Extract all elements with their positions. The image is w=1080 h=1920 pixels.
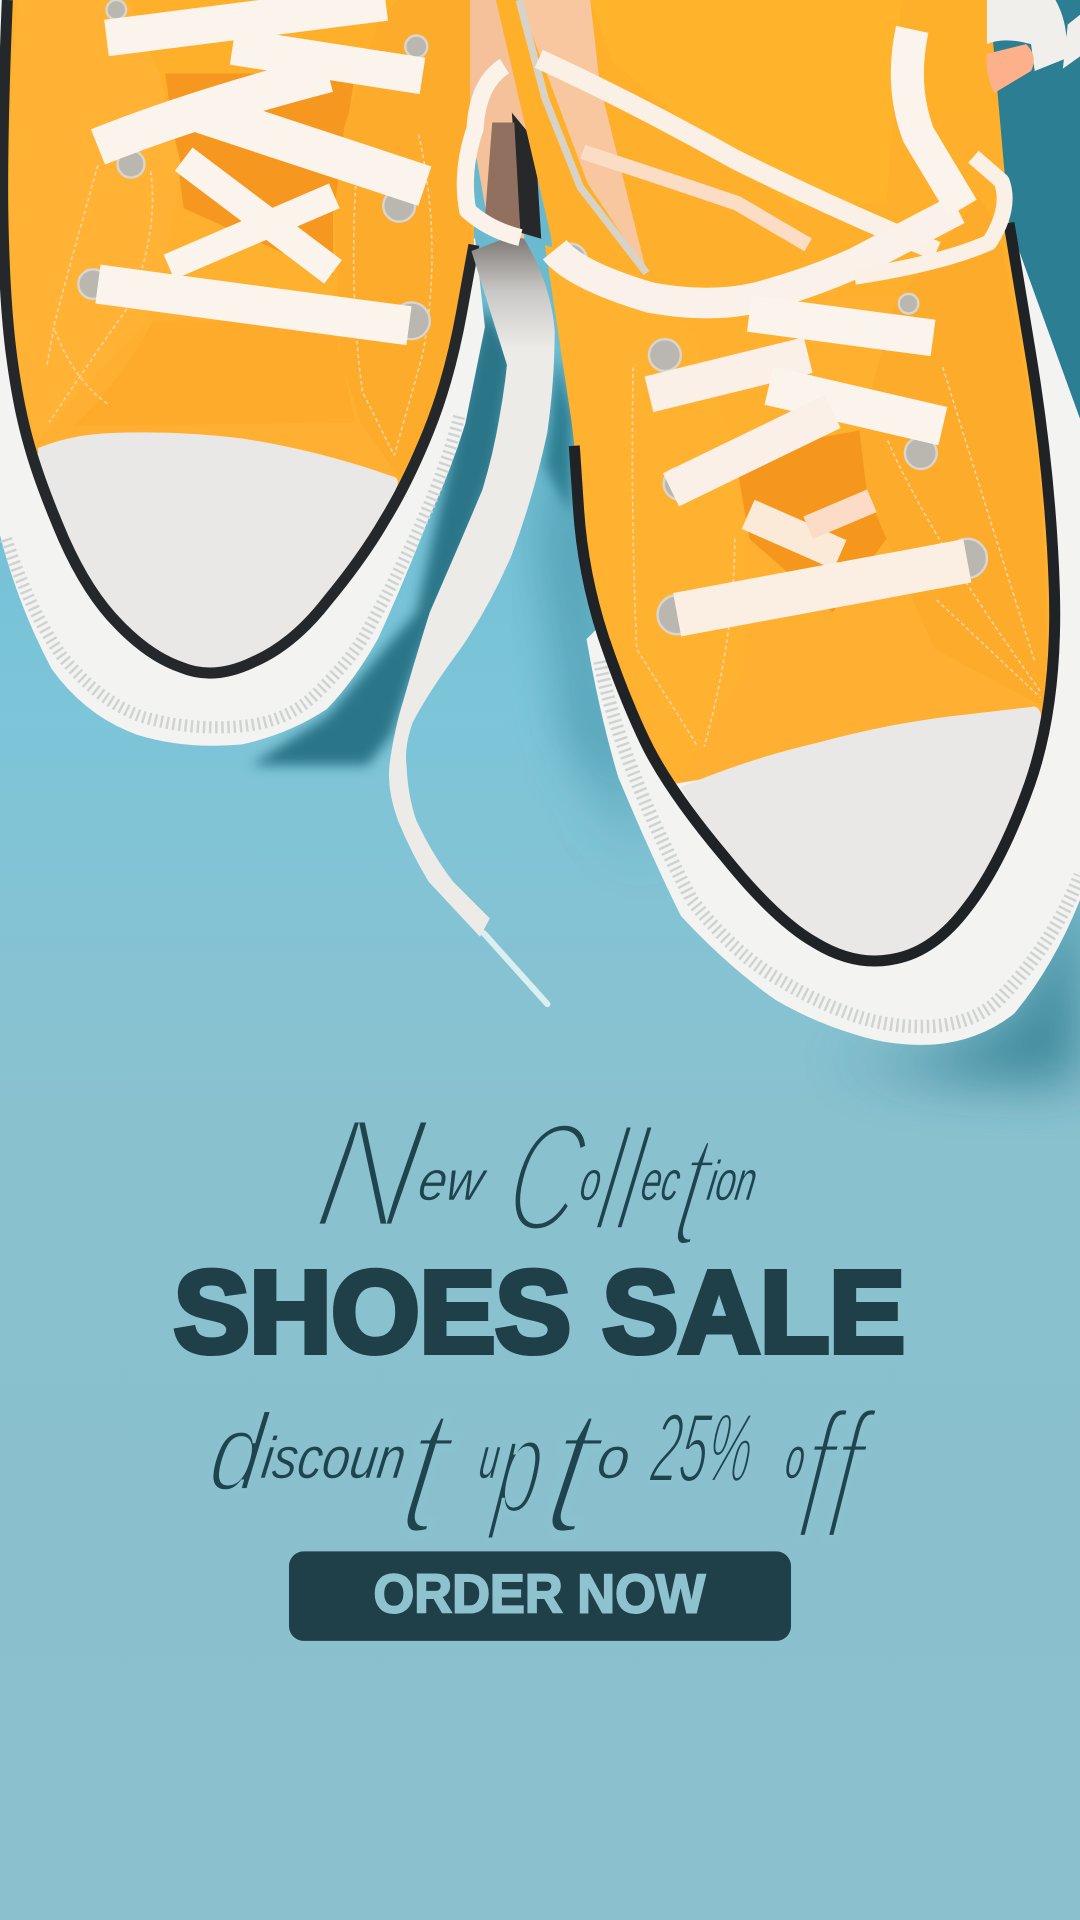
button: order now [289, 1551, 791, 1641]
lace tip top right [986, 44, 1034, 93]
left shoe stitching [47, 135, 432, 456]
left shoe [0, 0, 485, 746]
word: Collection: ion [703, 1150, 762, 1213]
button label: ORDER NOW [373, 1563, 705, 1625]
right shoe sole [587, 223, 1080, 1045]
word: discount: d [203, 1392, 275, 1514]
left shoe tongue gap [165, 73, 355, 276]
right shoe canvas [496, 0, 1055, 784]
left shoe lower tongue shade [73, 321, 355, 426]
word: New: ew [414, 1150, 492, 1213]
right shoe tongue [590, 0, 901, 208]
word: Collection: t [662, 1097, 727, 1281]
right shoe inner collar [519, 0, 647, 272]
right shoe eyelets [555, 244, 987, 634]
word: Collection: C [496, 1091, 598, 1264]
lace aglet [484, 933, 547, 1004]
word: up: p [486, 1390, 554, 1541]
right shoe tread [600, 661, 1080, 1027]
right shoe toe cap [681, 707, 1041, 961]
right shoe [496, 0, 1080, 1045]
word: to: o [594, 1425, 634, 1491]
word: up: u [476, 1425, 518, 1491]
left shoe sole [0, 0, 485, 746]
word: Collection: ll [587, 1099, 660, 1262]
word: to: t [533, 1368, 617, 1573]
word: discount: t [389, 1368, 467, 1573]
left shoe left eyestay [10, 0, 181, 443]
left shoe canvas [3, 0, 475, 490]
right shoe laces [539, 29, 1005, 615]
right shoe black stripe [574, 223, 1055, 961]
word: 25%: 25% [646, 1393, 761, 1503]
word: Collection: ec [637, 1150, 685, 1213]
loose shoelace [389, 233, 555, 1004]
right shoe right eyestay [860, 196, 1047, 708]
inner lace loop between shoes [465, 0, 541, 239]
right shoe inner shadow [735, 429, 887, 612]
word: discount: iscoun [258, 1425, 410, 1491]
left shoe eyelets [78, 0, 430, 339]
left shoe black stripe [3, 0, 474, 673]
headline: New Collection [305, 1086, 772, 1281]
right shoe collar seam [519, 0, 647, 273]
headline: SHOES SALE: SHOES SALE [174, 1247, 905, 1377]
left shoe laces [98, 2, 425, 326]
left shoe toe cap [38, 432, 398, 673]
word: off: o [782, 1425, 824, 1491]
right shoe stitching [632, 367, 1041, 747]
right shoe left eyestay [545, 245, 744, 784]
word: New: N [305, 1086, 437, 1261]
left shoe right eyestay [334, 0, 480, 478]
shadows under the shoes [251, 0, 1080, 1084]
word: Collection: o [576, 1150, 607, 1213]
lace end top right [987, 0, 1080, 71]
left shoe tread [6, 416, 459, 727]
subheading: discount up to 25% off [195, 1368, 884, 1579]
word: off: ff [788, 1374, 884, 1579]
